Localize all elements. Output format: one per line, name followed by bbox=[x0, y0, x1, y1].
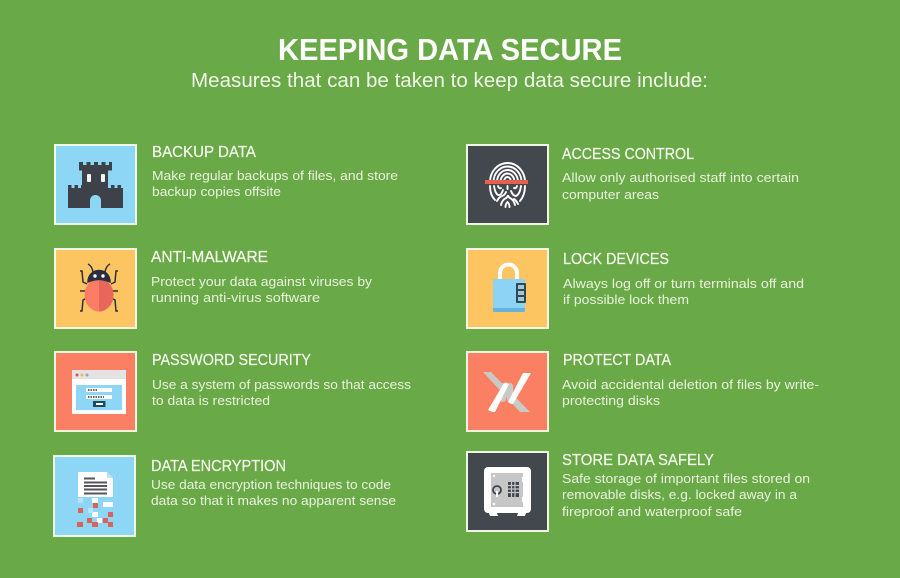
heading: DATA ENCRYPTION bbox=[151, 458, 286, 475]
heading: ACCESS CONTROL bbox=[562, 146, 694, 163]
description bbox=[563, 277, 804, 307]
panel: data encryption bbox=[54, 456, 396, 536]
description: data so that it makes no apparent sense bbox=[151, 494, 396, 508]
subtitle: Measures that can be taken to keep data secure include: bbox=[191, 70, 708, 92]
description bbox=[562, 171, 799, 202]
description: computer areas bbox=[562, 188, 659, 202]
description bbox=[562, 472, 810, 519]
heading: PASSWORD SECURITY bbox=[152, 352, 311, 369]
heading: PROTECT DATA bbox=[563, 352, 672, 369]
description: Allow only authorised staff into certain bbox=[562, 171, 799, 185]
icon: bug bbox=[55, 249, 136, 328]
description: fireproof and waterproof safe bbox=[562, 505, 742, 519]
heading: BACKUP DATA bbox=[152, 144, 257, 161]
panel: protect data bbox=[467, 352, 819, 431]
description: to data is restricted bbox=[152, 394, 270, 408]
description: if possible lock them bbox=[563, 293, 689, 307]
description: Avoid accidental deletion of files by write- bbox=[562, 378, 819, 392]
description bbox=[151, 478, 396, 508]
description: Always log off or turn terminals off and bbox=[563, 277, 804, 291]
description: backup copies offsite bbox=[152, 185, 281, 199]
icon: crossed write-protect tabs bbox=[467, 352, 548, 431]
description: Use data encryption techniques to code bbox=[151, 478, 391, 492]
description bbox=[152, 378, 411, 408]
description: Safe storage of important files stored on bbox=[562, 472, 810, 486]
description bbox=[562, 378, 819, 408]
icon: combination padlock bbox=[467, 249, 548, 328]
panel: lock devices bbox=[467, 249, 804, 328]
panel: backup data bbox=[55, 144, 398, 224]
description bbox=[152, 169, 398, 199]
title: KEEPING DATA SECURE bbox=[278, 32, 622, 67]
description: running anti-virus software bbox=[151, 291, 320, 305]
heading: LOCK DEVICES bbox=[563, 251, 669, 268]
description: Make regular backups of files, and store bbox=[152, 169, 398, 183]
panel: anti-malware bbox=[55, 249, 373, 328]
description bbox=[151, 275, 373, 305]
panel: access control bbox=[467, 145, 799, 224]
heading: STORE DATA SAFELY bbox=[562, 452, 714, 469]
description: protecting disks bbox=[562, 394, 660, 408]
icon: login window bbox=[55, 352, 136, 431]
icon: safe bbox=[467, 452, 548, 531]
panel: store data safely bbox=[467, 452, 810, 531]
heading: ANTI-MALWARE bbox=[151, 249, 268, 266]
description: Protect your data against viruses by bbox=[151, 275, 373, 289]
icon: fingerprint bbox=[467, 145, 548, 224]
description: Use a system of passwords so that access bbox=[152, 378, 411, 392]
icon: castle bbox=[55, 145, 136, 224]
panel: password security bbox=[55, 352, 411, 431]
icon: dissolving document bbox=[54, 456, 135, 536]
description: removable disks, e.g. locked away in a bbox=[562, 488, 797, 502]
